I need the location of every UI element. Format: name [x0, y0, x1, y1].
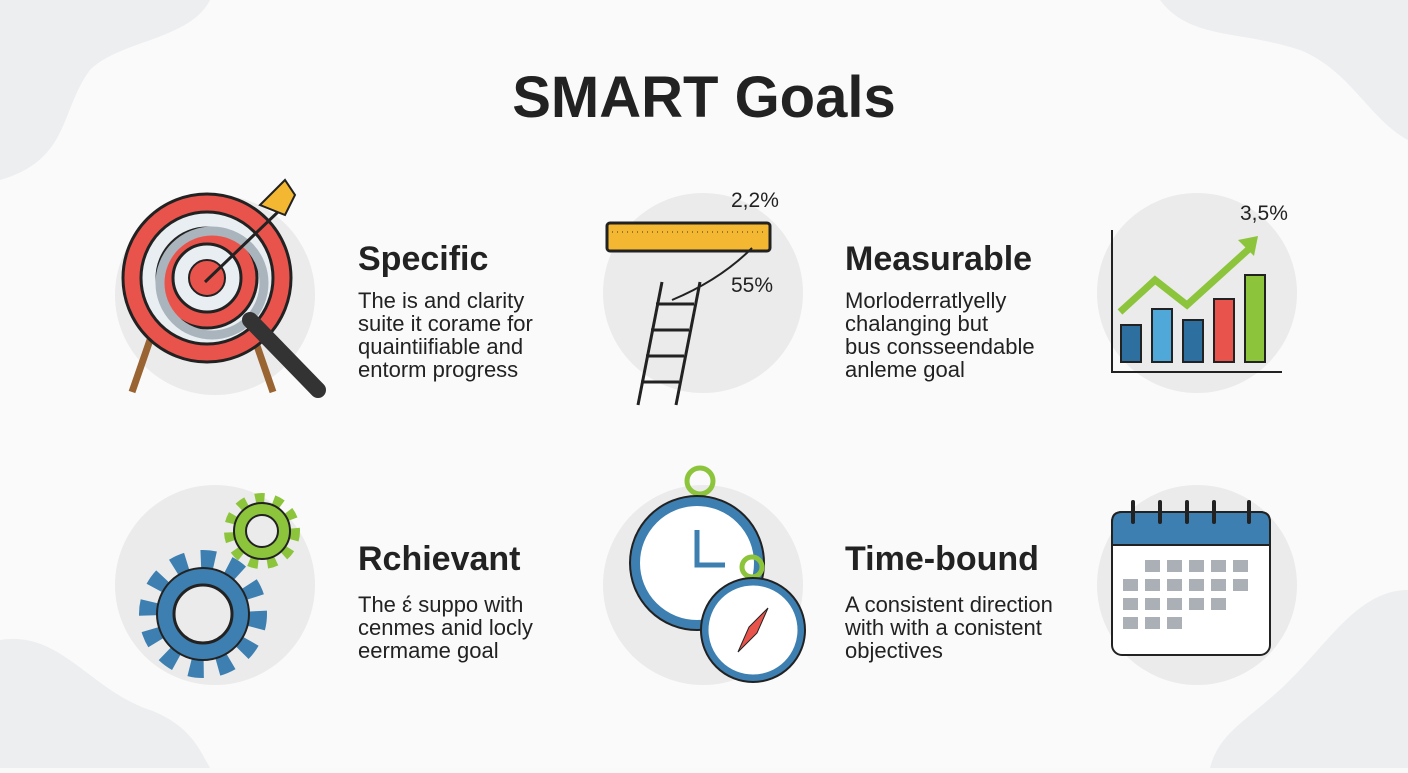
text: Specific body: suite it corame for [358, 311, 533, 336]
text: Specific body: quaintiifiable and [358, 334, 523, 359]
text: Rchievant body: eermame goal [358, 638, 499, 663]
icon: ruler and ladder: 2,2% [731, 189, 779, 212]
text: Measurable body: anleme goal [845, 357, 965, 382]
icon: bar chart [1097, 193, 1297, 393]
text: Measurable body: bus consseendable [845, 334, 1035, 359]
title: SMART Goals [512, 65, 896, 130]
text: Measurable body: chalanging but [845, 311, 988, 336]
icon: bar chart: 3,5% [1240, 202, 1288, 225]
icon: ruler and ladder: 55% [731, 274, 773, 297]
text: Time-bound body: A consistent direction [845, 592, 1053, 617]
text: Specific body: entorm progress [358, 357, 518, 382]
heading: Rchievant: Rchievant [358, 540, 520, 578]
heading: Measurable: Measurable [845, 240, 1032, 278]
text: Time-bound body: with with a conistent [844, 615, 1042, 640]
text: Measurable body: Morloderratlyelly [845, 288, 1006, 313]
heading: Time-bound: Time-bound [845, 540, 1039, 578]
text: Time-bound body: objectives [845, 638, 943, 663]
icon: calendar [1097, 485, 1297, 685]
text: Rchievant body: The ɛ́ suppo with [358, 592, 523, 617]
icon: stopwatches [603, 468, 805, 685]
heading: Specific: Specific [358, 240, 488, 278]
icon: gears [115, 485, 315, 685]
icon: ruler and ladder [603, 189, 803, 405]
text: Rchievant body: cenmes anid locly [358, 615, 533, 640]
icon: target with magnifier [115, 180, 318, 395]
text: Specific body: The is and clarity [358, 288, 524, 313]
